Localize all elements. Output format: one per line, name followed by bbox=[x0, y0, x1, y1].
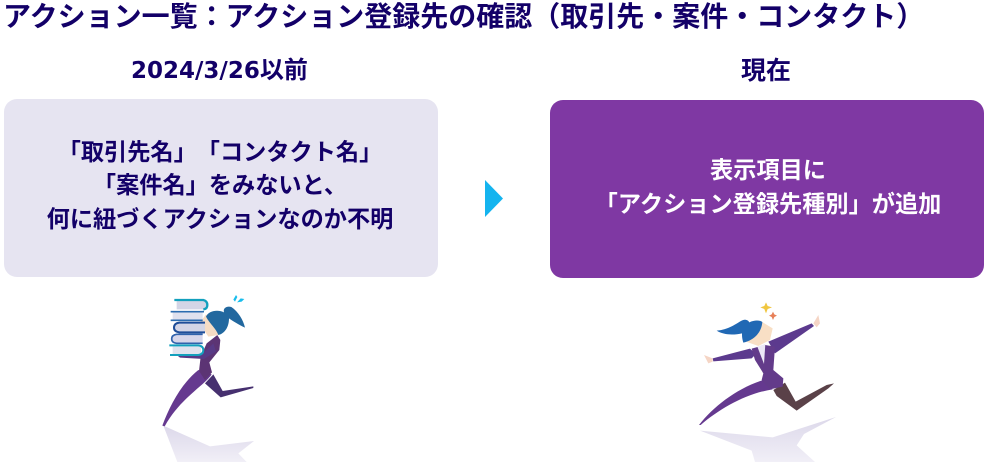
panel: before bbox=[4, 99, 438, 277]
arm bbox=[177, 343, 216, 359]
back leg bbox=[205, 374, 253, 397]
panel text: before: 「取引先名」「コンタクト名」 bbox=[58, 138, 382, 164]
hair bbox=[717, 320, 762, 343]
hands bbox=[704, 315, 820, 363]
illustration: running woman carrying books bbox=[162, 295, 254, 462]
near arm bbox=[713, 349, 756, 361]
front leg bbox=[162, 370, 212, 426]
hair bbox=[206, 307, 245, 335]
face bbox=[199, 314, 218, 337]
sparkles bbox=[760, 302, 777, 320]
illustration: leaping woman bbox=[699, 302, 836, 462]
torso bbox=[199, 335, 220, 380]
panel text: before bbox=[47, 138, 393, 232]
panel text: current bbox=[595, 157, 941, 216]
sweat drops bbox=[233, 295, 244, 302]
panel: current bbox=[550, 100, 984, 278]
panel text: before: 「案件名」をみないと、 bbox=[93, 172, 347, 198]
far arm bbox=[768, 323, 814, 353]
torso bbox=[752, 345, 783, 389]
panel text: current: 表示項目に bbox=[710, 157, 826, 183]
heading: current: 現在 bbox=[741, 57, 791, 85]
title: アクション一覧：アクション登録先の確認（取引先・案件・コンタクト） bbox=[3, 1, 924, 32]
shadow bbox=[163, 426, 254, 462]
heading: before: 2024/3/26以前 bbox=[131, 57, 308, 84]
arrow bbox=[485, 180, 503, 217]
panel text: current: 「アクション登録先種別」が追加 bbox=[595, 190, 941, 216]
face bbox=[746, 321, 773, 346]
shadow bbox=[700, 417, 836, 462]
front leg bbox=[699, 380, 773, 425]
shirt bbox=[757, 344, 765, 364]
books bbox=[169, 300, 207, 355]
back leg bbox=[773, 383, 834, 411]
panel text: before: 何に紐づくアクションなのか不明 bbox=[47, 206, 393, 232]
